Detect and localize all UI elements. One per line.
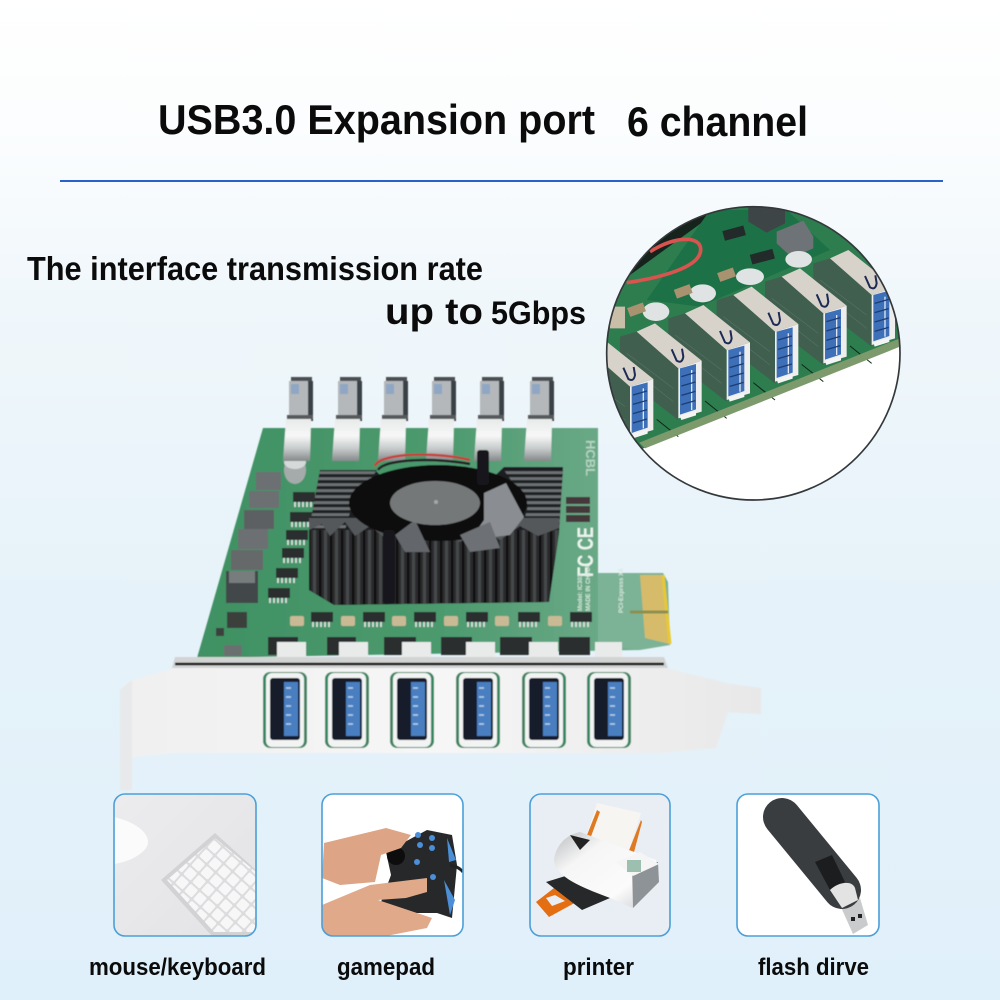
silkscreen labels: HCBL <box>583 440 598 476</box>
card: mouse and keyboard <box>114 794 256 936</box>
lower ICs <box>268 637 590 655</box>
connector white tabs <box>277 642 622 658</box>
silkscreen labels: MADE IN CHINA <box>586 564 592 611</box>
metal bracket <box>120 657 761 790</box>
text block: transmission rate: The interface transmission rate <box>27 250 483 287</box>
silkscreen labels: PCI-Express X4 <box>619 568 625 613</box>
electrolytic capacitor <box>284 455 306 484</box>
title: 6 channel <box>627 98 808 145</box>
text block: transmission rate: 5Gbps <box>491 295 586 331</box>
label: flash dirve: flash dirve <box>758 954 869 981</box>
heatsink with fan <box>309 450 563 605</box>
title: USB3.0 Expansion port <box>158 96 595 143</box>
fan mounting posts <box>383 530 395 604</box>
card: printer <box>530 794 670 936</box>
gold finger connector <box>598 573 670 650</box>
external USB 3.0 ports <box>263 672 631 748</box>
card: flash drive <box>737 794 879 936</box>
inset circle: close-up of internal USB ports <box>606 206 901 501</box>
inductors <box>226 472 281 603</box>
label: mouse/keyboard: mouse/keyboard <box>89 954 266 981</box>
silkscreen labels: FC CE <box>573 527 598 577</box>
title <box>158 96 808 145</box>
PCIe card <box>120 377 761 790</box>
internal USB connectors <box>283 377 554 461</box>
bottom row SOIC chips and capacitors <box>290 612 592 627</box>
small chips bottom left <box>216 612 247 656</box>
label: printer: printer <box>563 954 634 981</box>
card: gamepad <box>322 794 463 936</box>
silkscreen labels <box>573 440 625 613</box>
left row SOIC chips <box>268 492 315 603</box>
circuit board <box>197 428 640 658</box>
text block: transmission rate <box>27 250 586 332</box>
text block: transmission rate: up to <box>385 291 483 332</box>
silkscreen labels: Model: IC303 <box>578 573 584 611</box>
label: gamepad: gamepad <box>337 954 435 981</box>
resistors <box>566 497 590 522</box>
fan <box>349 465 527 552</box>
fan wires <box>375 455 470 488</box>
